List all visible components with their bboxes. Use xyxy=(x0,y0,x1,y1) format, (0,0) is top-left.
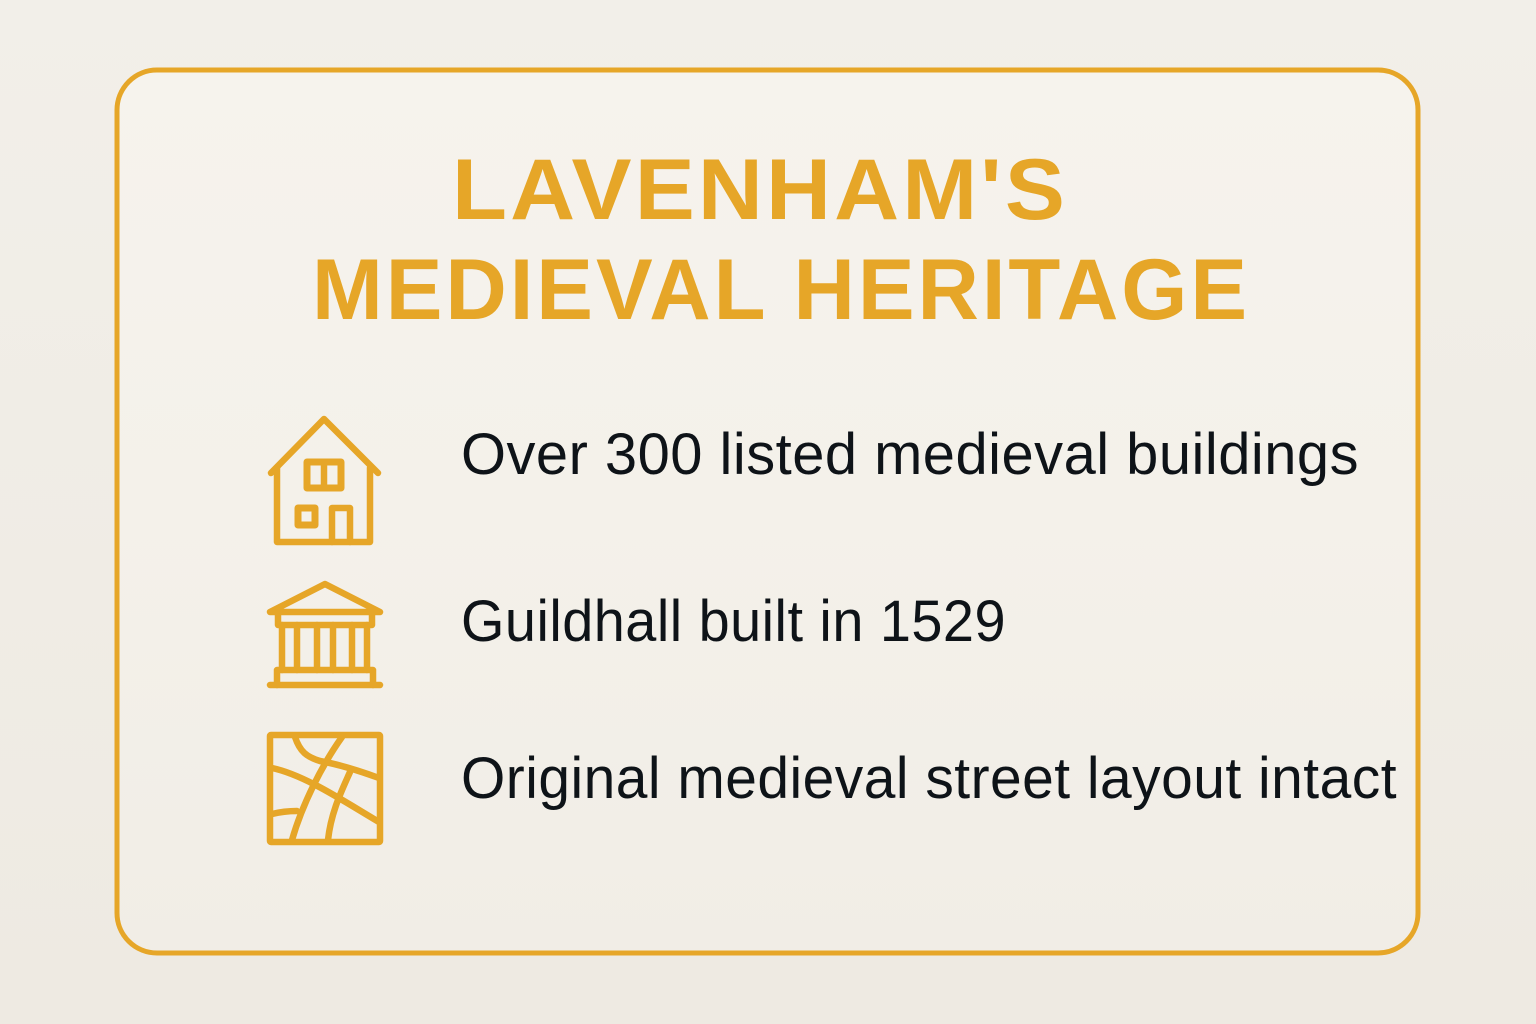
text: street layout: Original medieval street layout intact xyxy=(461,746,1397,811)
text: guildhall date: Guildhall built in 1529 xyxy=(461,589,1006,654)
icon: guildhall xyxy=(270,584,380,685)
title xyxy=(312,142,1250,338)
icon: street map xyxy=(270,735,380,842)
title: LAVENHAM'S xyxy=(452,142,1068,238)
title: MEDIEVAL HERITAGE xyxy=(312,242,1250,338)
text: listed buildings: Over 300 listed medieval buildings xyxy=(461,422,1359,487)
panel: rounded frame xyxy=(117,70,1418,953)
icon: house xyxy=(271,419,378,542)
